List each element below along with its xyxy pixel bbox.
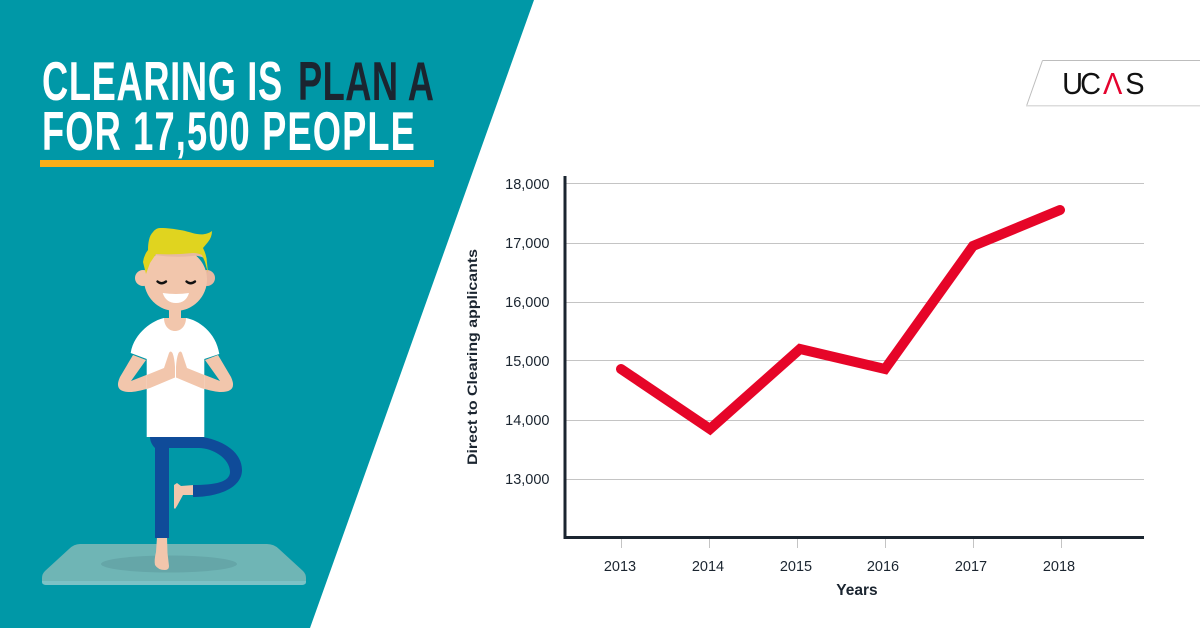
left arm: [118, 352, 175, 392]
t-shirt: [131, 318, 219, 437]
grid lines: [566, 184, 1144, 548]
right arm: [176, 352, 233, 392]
trousers: [150, 437, 242, 538]
x axis labels: 2014: [692, 559, 724, 575]
axes: [565, 176, 1144, 538]
y axis labels: 13,000: [505, 472, 550, 488]
raised foot: [174, 483, 194, 509]
x axis labels: 2013: [604, 559, 636, 575]
hair shadow: [155, 252, 204, 258]
title: PLAN A: [298, 50, 434, 112]
title: CLEARING IS: [42, 50, 282, 112]
neck: [164, 308, 186, 331]
title: FOR 17,500 PEOPLE: [42, 100, 415, 162]
title underline: [40, 160, 434, 167]
smile: [163, 293, 189, 303]
y axis title: Direct to Clearing applicants: [464, 249, 480, 465]
title: [42, 50, 434, 162]
x axis labels: 2018: [1043, 559, 1075, 575]
y axis labels: 16,000: [505, 295, 550, 311]
y axis labels: 14,000: [505, 413, 550, 429]
icon: yoga mat: [42, 544, 306, 585]
panel: teal background: [0, 0, 534, 628]
x axis labels: 2016: [867, 559, 899, 575]
head: [144, 248, 207, 311]
logo: UCAS: [1026, 60, 1200, 106]
illustration: person in tree pose: [118, 228, 242, 570]
logo: UCAS: UCΛS: [1062, 67, 1145, 101]
x axis labels: [604, 559, 1075, 575]
y axis labels: 15,000: [505, 354, 550, 370]
right forearm over t-shirt: [176, 352, 204, 389]
hair: [143, 228, 212, 274]
standing foot: [155, 537, 169, 570]
eyes: [158, 282, 195, 283]
data line: [621, 210, 1060, 429]
x axis title: Years: [836, 582, 878, 599]
ears: [135, 270, 151, 286]
left forearm over t-shirt: [147, 352, 175, 389]
chart: direct to Clearing applicants, line chart: [464, 176, 1144, 599]
y axis labels: 18,000: [505, 177, 550, 193]
y axis labels: 17,000: [505, 236, 550, 252]
x axis labels: 2017: [955, 559, 987, 575]
y axis labels: [505, 177, 550, 488]
x axis labels: 2015: [780, 559, 812, 575]
